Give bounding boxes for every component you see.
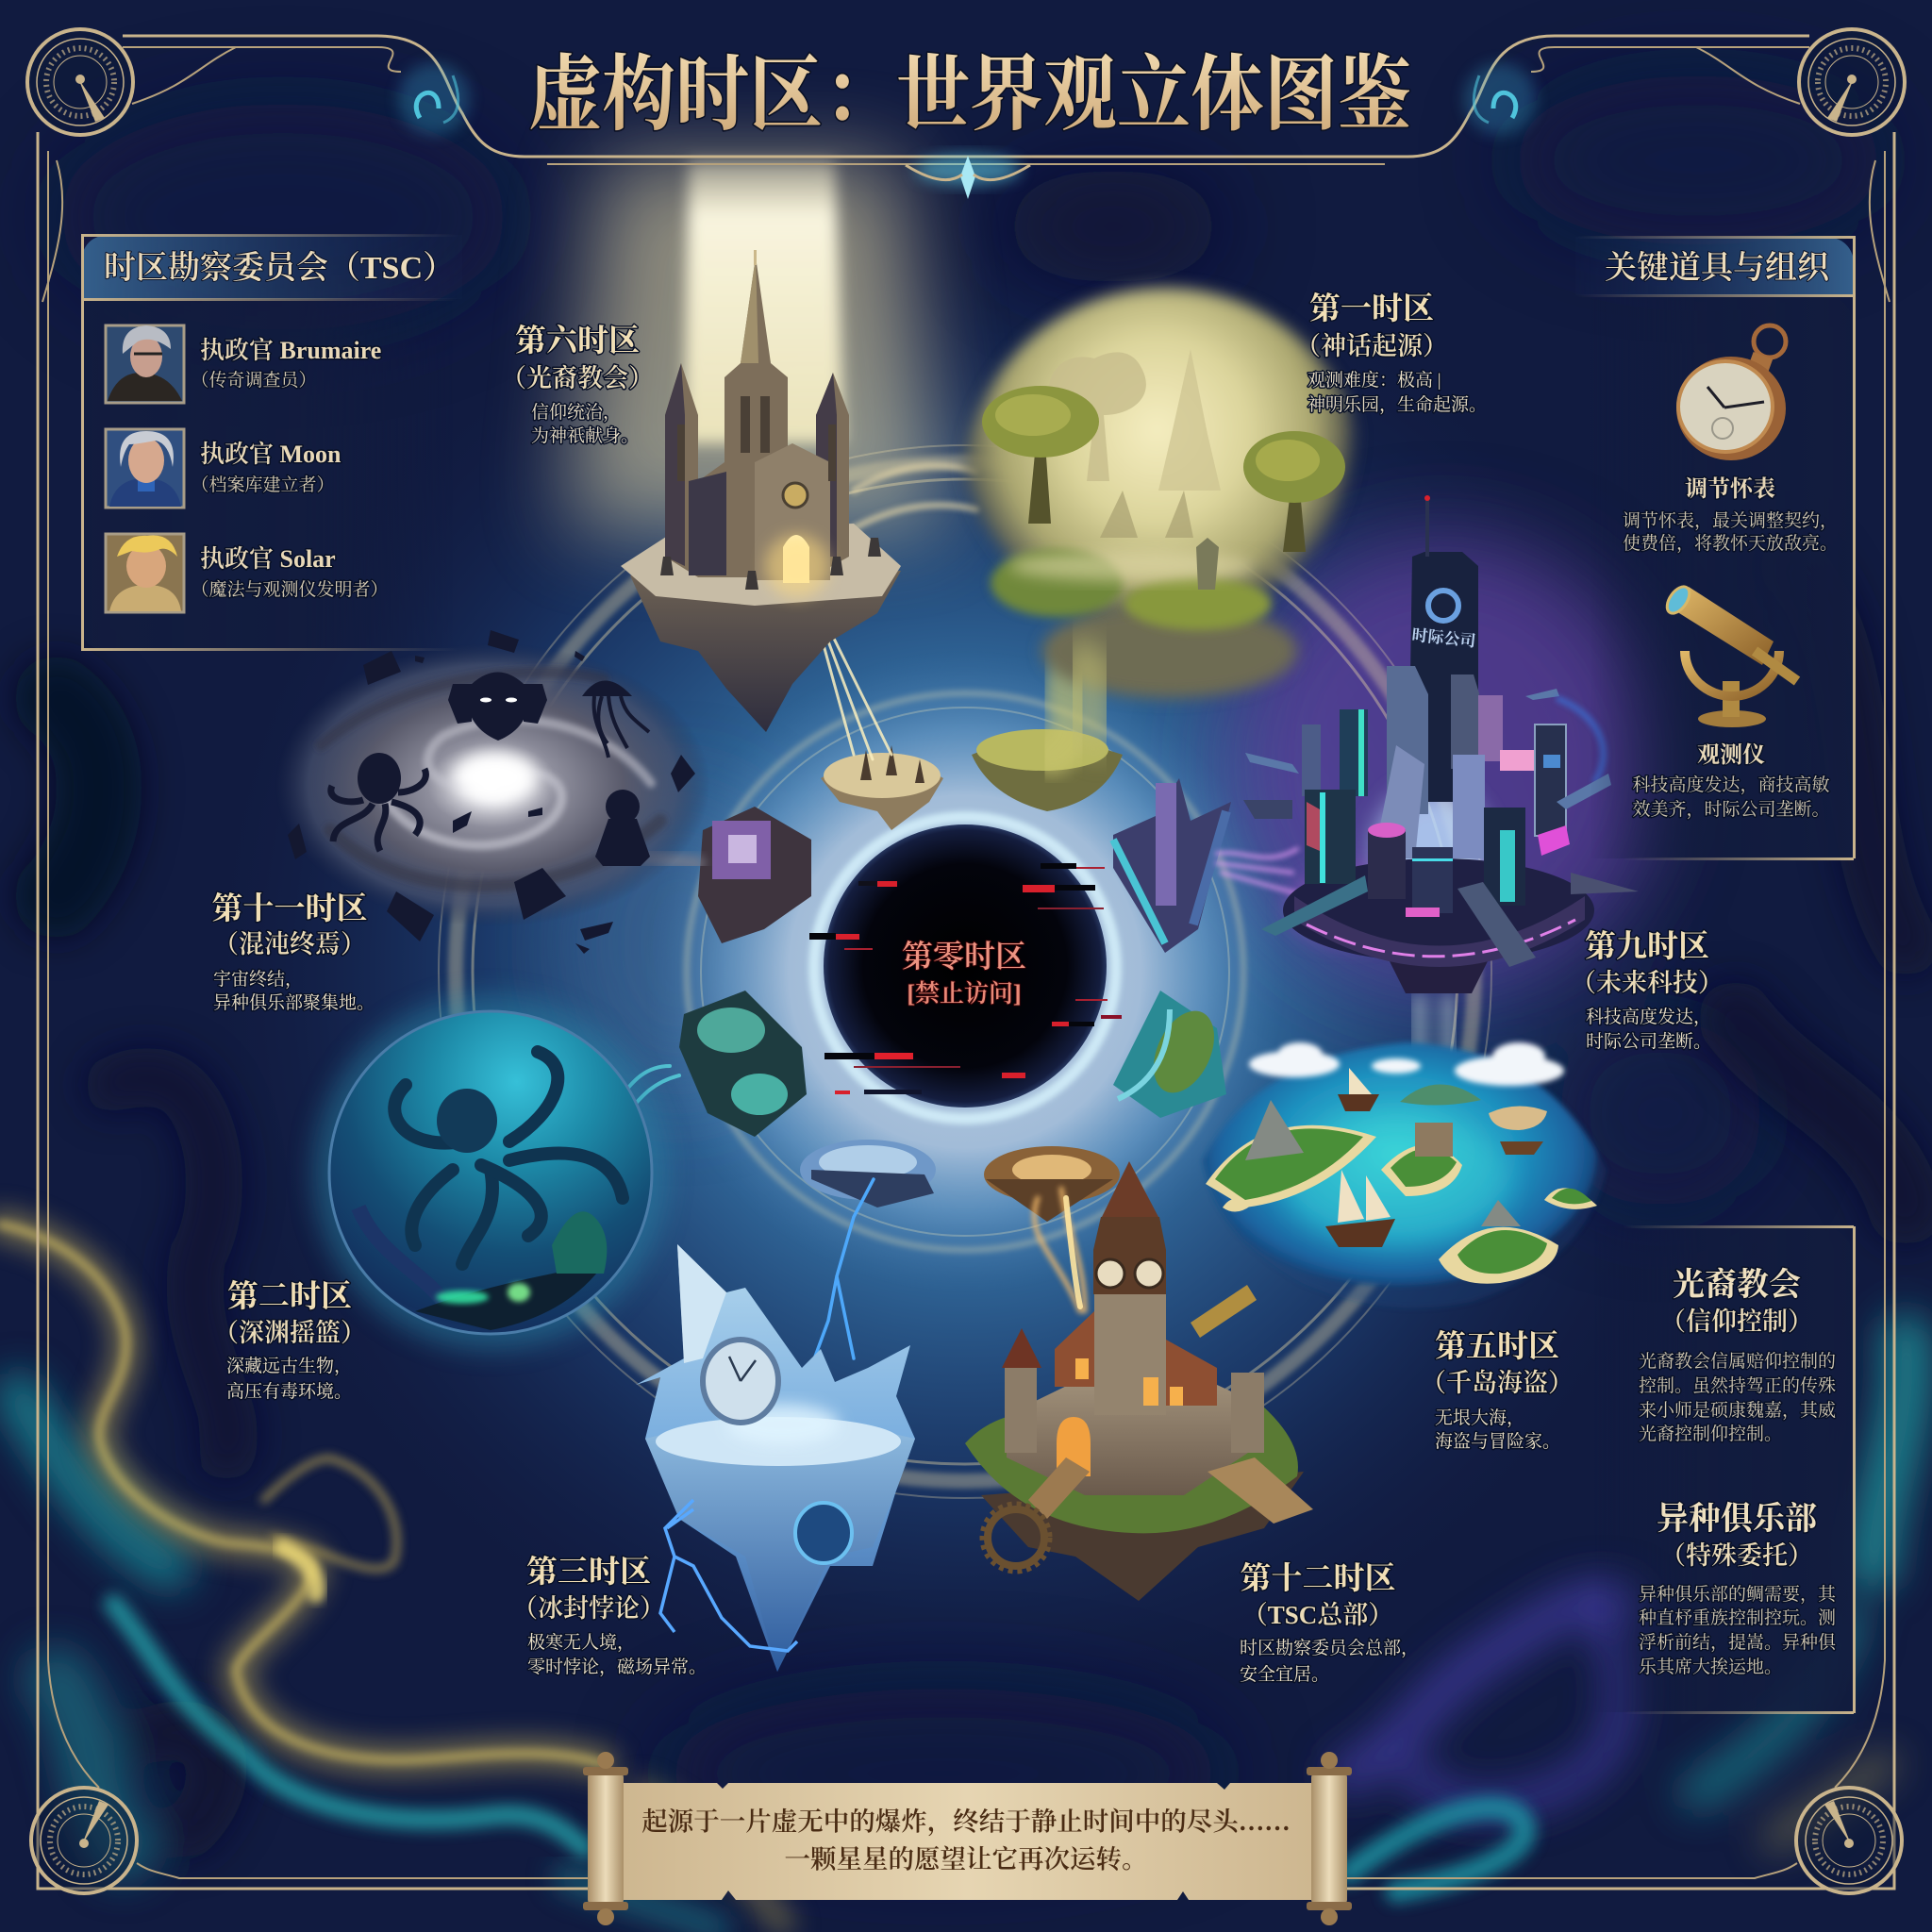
- item description: 效美齐，时际公司垄断。: [1632, 799, 1830, 820]
- label: 第十一时区: 宇宙终结，: [213, 969, 303, 990]
- panel heading: 关键道具与组织: [1605, 250, 1831, 286]
- vortex: 第十一时区 chaos: [275, 630, 709, 954]
- label: 第十二时区: 时区勘察委员会总部，: [1240, 1638, 1419, 1658]
- label: 第五时区: 无垠大海，: [1435, 1407, 1524, 1428]
- label: 第十一时区: 第十一时区: [211, 891, 368, 926]
- island: 第九时区 future city: [1243, 495, 1639, 993]
- item description: [1632, 774, 1830, 820]
- label: 第一时区: 第一时区: [1309, 291, 1434, 326]
- scroll text: 起源于一片虚无中的爆炸，终结于静止时间中的尽头……: [641, 1807, 1291, 1837]
- title: 虚构时区：世界观立体图鉴: [528, 49, 1411, 141]
- mini islands around portal: [604, 465, 1448, 1385]
- portal label: [902, 940, 1026, 1008]
- light beam: [566, 160, 943, 528]
- portal: 第零时区: [644, 651, 1286, 1292]
- name block: （传奇调查员）: [200, 370, 308, 391]
- organisation: 光裔教会: 光裔控制仰控制。: [1639, 1424, 1782, 1444]
- panel heading: 时区勘察委员会（TSC）: [104, 250, 455, 286]
- island: 第五时区 archipelago: [1203, 1042, 1607, 1308]
- label: 第十二时区: （TSC总部）: [1255, 1601, 1381, 1629]
- island: 第三时区 ice: [636, 1244, 915, 1672]
- organisation: 异种俱乐部: 种直杼重族控制控玩。测: [1639, 1607, 1836, 1628]
- organisation: 光裔教会: [1639, 1267, 1836, 1444]
- label: 第五时区: （千岛海盗）: [1434, 1369, 1560, 1397]
- label: 第三时区: 第三时区: [526, 1555, 651, 1590]
- organisation: 异种俱乐部: 乐其席大挨运地。: [1639, 1657, 1782, 1677]
- name block: （档案库建立者）: [200, 475, 325, 495]
- item description: 调节怀表，最关调整契约，: [1623, 509, 1838, 531]
- center ornament: [906, 155, 1030, 199]
- name block: 执政官 Solar: [200, 545, 336, 573]
- panel: 关键道具与组织: [1575, 236, 1856, 860]
- item description: 科技高度发达，商技高敏: [1632, 774, 1830, 795]
- label: 第二时区: 第二时区: [227, 1279, 352, 1314]
- portrait: Solar: [106, 534, 184, 612]
- label: 第九时区: 科技高度发达，: [1586, 1007, 1711, 1027]
- label: 第六时区: 第六时区: [515, 324, 640, 358]
- label: 第六时区: （光裔教会）: [513, 364, 641, 392]
- organisation: 异种俱乐部: 浮析前结，提嵩。异种俱: [1639, 1632, 1836, 1653]
- label: 第三时区: 零时悖论，磁场异常。: [527, 1657, 707, 1677]
- organisation: 异种俱乐部: 异种俱乐部: [1657, 1501, 1817, 1537]
- ships: [1325, 1068, 1547, 1247]
- corner clocks: [27, 29, 133, 135]
- scroll text: 一颗星星的愿望让它再次运转。: [785, 1844, 1147, 1874]
- label: 第二时区: 高压有毒环境。: [226, 1381, 352, 1402]
- golden orbit rings: [439, 445, 1491, 1498]
- tower sign: 时际公司: [1411, 626, 1476, 651]
- name block: [200, 337, 381, 391]
- label: 第二时区: [226, 1279, 353, 1402]
- label: 第五时区: 海盗与冒险家。: [1435, 1431, 1560, 1452]
- island: 第一时区 myth: [962, 288, 1368, 745]
- label: 第一时区: 观测难度：极高 |: [1307, 369, 1441, 391]
- label: 第十二时区: 安全宜居。: [1240, 1664, 1329, 1685]
- label: 第二时区: 深藏远古生物，: [226, 1356, 352, 1376]
- label: 第一时区: [1307, 291, 1487, 415]
- organisation: 异种俱乐部: [1639, 1501, 1837, 1677]
- scroll banner: [583, 1752, 1352, 1925]
- label: 第十一时区: （混沌终焉）: [226, 930, 353, 958]
- name block: 执政官 Moon: [200, 441, 341, 468]
- name block: [200, 441, 341, 495]
- name block: 执政官 Brumaire: [200, 337, 381, 364]
- label: 第一时区: 神明乐园，生命起源。: [1307, 394, 1487, 415]
- label: 第三时区: （冰封悖论）: [525, 1594, 653, 1623]
- item description: 使费倍，将教怀天放敌亮。: [1623, 533, 1838, 554]
- icon: pocket watch: [1676, 325, 1786, 460]
- name block: （魔法与观测仪发明者）: [200, 579, 379, 600]
- island: 第十二时区 castle: [965, 1161, 1313, 1601]
- item name: 调节怀表: [1685, 475, 1775, 502]
- label: 第三时区: [525, 1555, 707, 1677]
- sphere: 第二时区 abyss: [313, 995, 668, 1350]
- label: 第九时区: 第九时区: [1585, 929, 1709, 964]
- portal label: 第零时区: [902, 940, 1026, 974]
- label: 第九时区: [1583, 929, 1711, 1052]
- organisation: 异种俱乐部: （特殊委托）: [1674, 1541, 1800, 1570]
- glitch bars: [809, 863, 1122, 1094]
- energy links: [604, 465, 1448, 1385]
- teal swirls: [416, 75, 1516, 123]
- organisation: 光裔教会: （信仰控制）: [1674, 1307, 1800, 1336]
- silhouettes: [467, 672, 529, 741]
- label: 第五时区: [1434, 1329, 1560, 1452]
- portrait: Moon: [106, 429, 184, 508]
- lightning: [660, 1500, 797, 1651]
- label: 第十二时区: [1240, 1561, 1419, 1685]
- organisation: 光裔教会: 来小师是硕康魏嘉，其威: [1639, 1400, 1836, 1421]
- label: 第一时区: （神话起源）: [1307, 332, 1436, 360]
- organisation: 光裔教会: 控制。虽然持驾正的传殊: [1639, 1375, 1836, 1396]
- scroll text: [641, 1807, 1291, 1874]
- label: 第三时区: 极寒无人境，: [527, 1631, 635, 1653]
- organisation: 光裔教会: 光裔教会信属赔仰控制的: [1639, 1351, 1836, 1372]
- name block: [200, 545, 379, 600]
- organisation: 异种俱乐部: 异种俱乐部的鲷需要，其: [1639, 1584, 1837, 1605]
- item description: [1623, 509, 1838, 554]
- organisation: 光裔教会: 光裔教会: [1673, 1267, 1801, 1303]
- label: 第九时区: （未来科技）: [1583, 969, 1711, 997]
- item name: 观测仪: [1697, 742, 1765, 768]
- label: 第十二时区: 第十二时区: [1240, 1561, 1396, 1596]
- label: 第十一时区: 异种俱乐部聚集地。: [213, 992, 375, 1013]
- icon: telescope: [1662, 583, 1797, 727]
- label: 第二时区: （深渊摇篮）: [226, 1319, 353, 1347]
- panel: 时区勘察委员会: [81, 234, 462, 651]
- panel: 组织: [1594, 1225, 1856, 1714]
- portrait: Brumaire: [106, 325, 184, 403]
- label: 第六时区: [513, 324, 641, 446]
- label: 第六时区: 为神祇献身。: [531, 425, 639, 446]
- island: 第六时区 cathedral: [621, 250, 901, 732]
- label: 第十一时区: [211, 891, 375, 1013]
- portal label: [禁止访问]: [907, 980, 1022, 1008]
- label: 第六时区: 信仰统治，: [531, 402, 621, 423]
- label: 第五时区: 第五时区: [1435, 1329, 1559, 1364]
- label: 第九时区: 时际公司垄断。: [1586, 1031, 1711, 1052]
